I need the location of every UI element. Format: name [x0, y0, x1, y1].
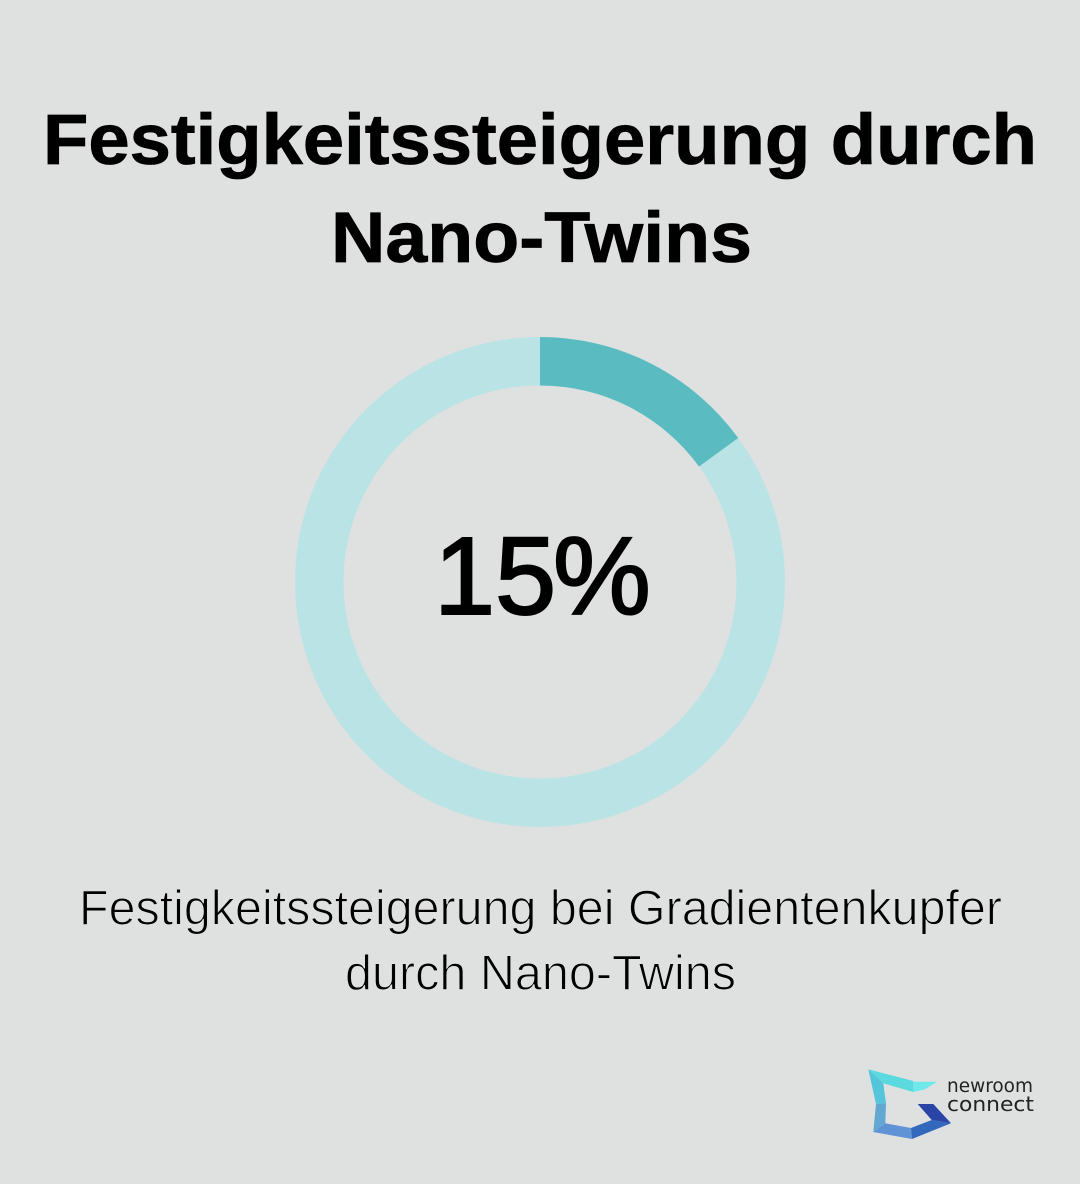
title: Festigkeitssteigerung durch — [43, 101, 1037, 180]
logo wordmark: newroom — [947, 1075, 1033, 1097]
donut track — [319, 361, 761, 803]
caption: durch Nano-Twins — [345, 946, 736, 1000]
donut chart: 15% — [319, 337, 761, 803]
caption — [79, 882, 1002, 1000]
percentage value: 15% — [434, 515, 651, 638]
logo wordmark — [947, 1075, 1034, 1116]
title — [43, 101, 1037, 278]
title: Nano-Twins — [331, 199, 752, 278]
logo wordmark: connect — [947, 1092, 1034, 1116]
logo: newroom connect — [868, 1069, 1034, 1139]
caption: Festigkeitssteigerung bei Gradientenkupfer — [79, 882, 1002, 936]
donut highlighted segment — [540, 337, 738, 466]
logo mark — [868, 1069, 951, 1139]
